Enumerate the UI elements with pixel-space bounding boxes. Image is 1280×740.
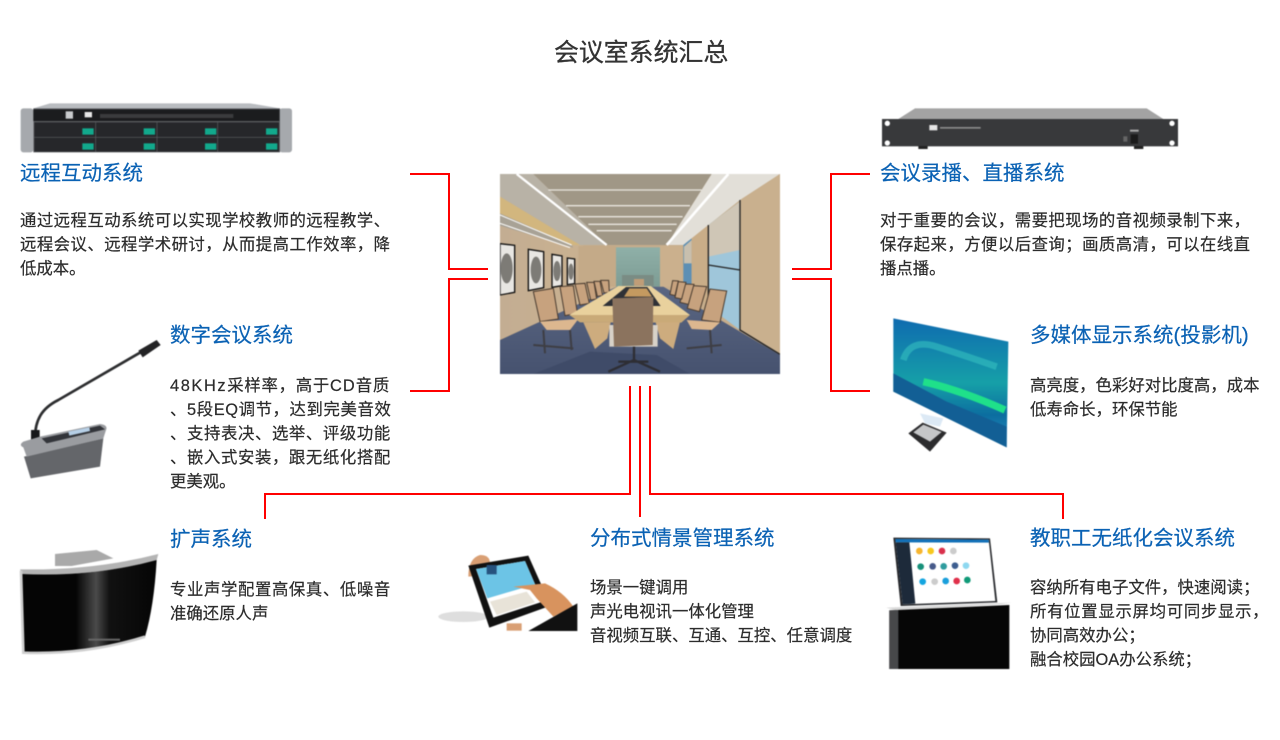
icon: gooseneck microphone unit [20, 340, 162, 479]
description [20, 212, 390, 278]
description: 协同高效办公； [1030, 627, 1145, 645]
heading: 分布式情景管理系统 [590, 527, 774, 550]
description [590, 578, 852, 645]
description: 通过远程互动系统可以实现学校教师的远程教学、 [20, 212, 390, 230]
panel: paperless conference [887, 527, 1269, 670]
description: 所有位置显示屏均可同步显示， [1030, 603, 1269, 621]
table [569, 286, 690, 315]
description: 容纳所有电子文件，快速阅读； [1030, 579, 1259, 597]
heading: 会议录播、直播系统 [880, 162, 1064, 185]
heading: 数字会议系统 [170, 324, 293, 347]
icon: recorder rack unit [881, 108, 1179, 150]
icon: projector and screen [892, 318, 1010, 452]
description: 播点播。 [880, 260, 946, 278]
panel: recording and live streaming [880, 108, 1250, 278]
description: 音视频互联、互通、互控、任意调度 [590, 627, 852, 645]
ceiling [500, 174, 607, 245]
side chairs [533, 280, 727, 322]
description [1030, 376, 1259, 419]
left wall [500, 225, 617, 339]
heading: 教职工无纸化会议系统 [1030, 527, 1235, 550]
icon: tablet in hands [438, 554, 578, 632]
description: 场景一键调用 [590, 579, 688, 597]
panel: multimedia display [892, 318, 1259, 452]
description [170, 376, 392, 491]
pictures [500, 244, 575, 295]
front chair [609, 325, 658, 347]
heading: 扩声系统 [170, 528, 252, 551]
description: 低寿命长，环保节能 [1030, 401, 1178, 419]
description: 远程会议、远程学术研讨，从而提高工作效率，降 [20, 236, 390, 254]
description: 专业声学配置高保真、低噪音 [170, 581, 391, 599]
description: 融合校园OA办公系统； [1030, 651, 1201, 669]
description: 、嵌入式安装，跟无纸化搭配 [170, 449, 391, 467]
heading: 远程互动系统 [20, 162, 143, 185]
floor [500, 287, 780, 374]
description [170, 580, 391, 623]
icon: rack server [20, 102, 292, 154]
panel: distributed scene management [438, 527, 852, 645]
description: 准确还原人声 [170, 605, 268, 623]
description: 声光电视讯一体化管理 [590, 603, 754, 621]
description [1030, 578, 1269, 669]
right wall [740, 174, 780, 354]
description: 对于重要的会议，需要把现场的音视频录制下来， [880, 212, 1250, 230]
description: 48KHz采样率，高于CD音质 [170, 377, 390, 395]
description: 更美观。 [170, 473, 236, 491]
icon: curved speaker [19, 550, 159, 655]
panel: sound reinforcement [19, 528, 391, 655]
back wall [578, 246, 617, 287]
heading: 多媒体显示系统(投影机) [1030, 324, 1249, 347]
description: 低成本。 [20, 260, 86, 278]
description: 、5段EQ调节，达到完美音效 [170, 401, 392, 419]
description [880, 212, 1250, 278]
central photo: conference room [499, 173, 781, 375]
icon: paperless terminal lift [887, 536, 1010, 670]
panel: digital conference [20, 324, 392, 491]
description: 高亮度，色彩好对比度高，成本 [1030, 377, 1259, 395]
title: 会议室系统汇总 [554, 39, 728, 67]
description: 保存起来，方便以后查询；画质高清，可以在线直 [880, 236, 1250, 254]
panel: remote interaction [20, 102, 390, 278]
description: 、支持表决、选举、评级功能 [170, 425, 391, 443]
